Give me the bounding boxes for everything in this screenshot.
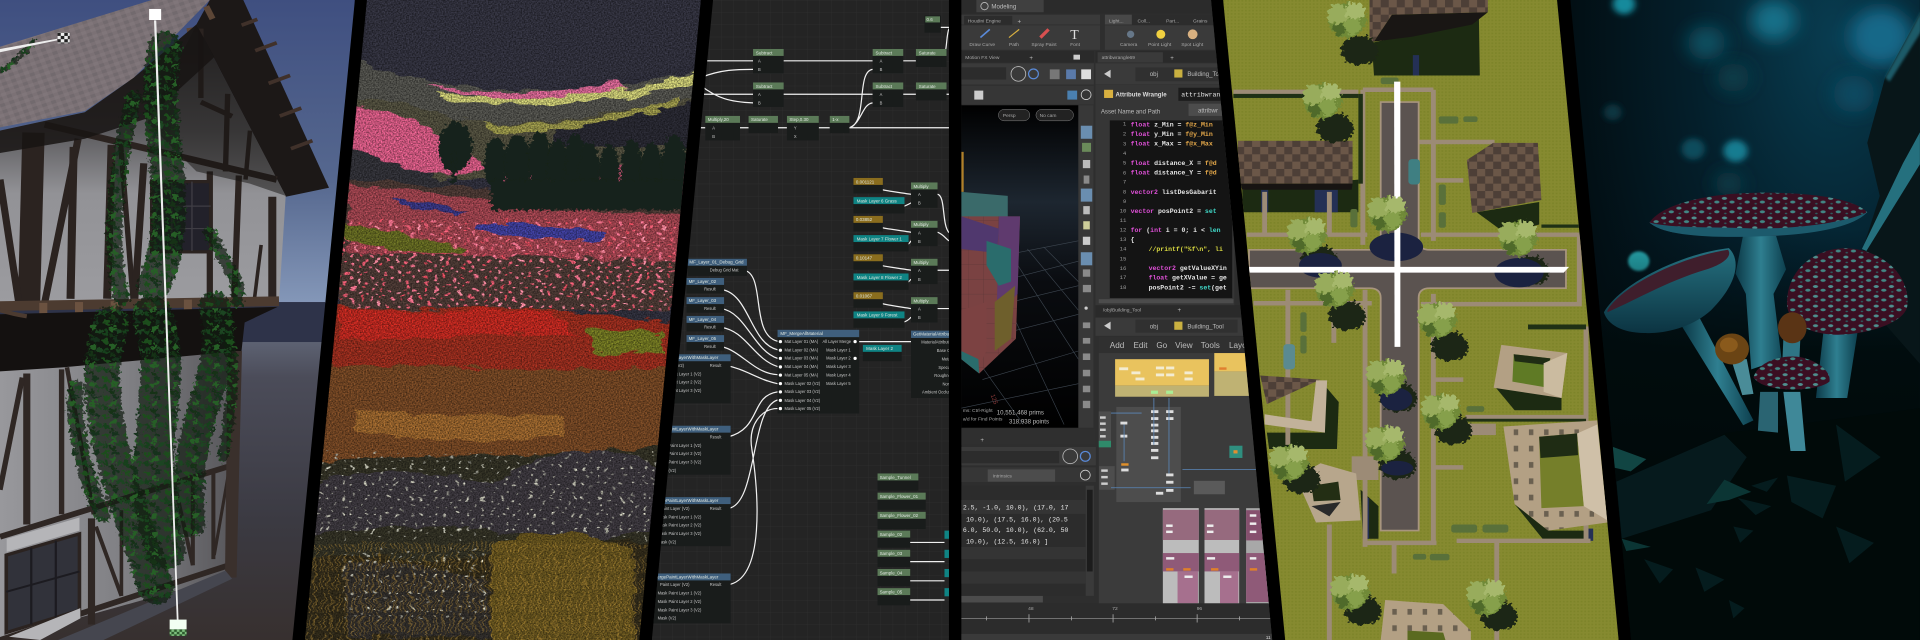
node wires [701,27,949,600]
vex code: float z_Min = f@z_Min [1131,122,1213,129]
right wrangle pane: Asset Name and Path [1101,108,1160,115]
lower left pane: 2.5, -1.0, 10.0), (17.0, 17 [963,504,1069,511]
timeline: 48 [1028,606,1034,612]
timeline: 72 [1112,606,1118,612]
node group: top math nodes: Y [794,125,797,130]
node: MF_MergeAllMaterial: Mask Layer 5 [826,381,851,386]
network editor: /obj/Building_Tool [1103,307,1141,313]
small hedges [1300,78,1508,560]
node group: material function layers: MF_Layer_05 [689,336,717,341]
node: material attributes: Base Color [937,348,958,353]
vex code: vector2 listDesGabarit [1131,189,1217,196]
network editor: Layout [1229,341,1254,350]
node group: texture samples: Sample_04 [880,570,903,575]
node group: texture samples: Sample_02 [880,532,903,537]
shelf: Draw Curve [969,42,995,48]
panel: town layout top view [1220,0,1622,640]
view pills [998,109,1073,121]
vex code: 7 [1123,179,1126,186]
node: MF_MergeAllMaterial: Mask Layer 02 (V2) [784,381,821,386]
gable shadow [148,58,286,196]
roof [0,0,210,127]
network editor: Add [1110,341,1125,350]
yellow network box right [1214,353,1249,396]
node group: mask multiply nodes: 0.01067 [856,294,873,299]
ui base [961,0,1288,640]
node group: mask multiply nodes: B [918,200,921,205]
rafters [128,5,313,150]
lower wall [0,351,241,640]
pane tabs [961,51,1094,104]
joists [39,300,192,313]
vex code: float getXValue = ge [1149,275,1227,282]
side nodes [1099,411,1272,494]
right wrangle pane: attribwrangle69 [1102,55,1135,61]
node: MF_MergeAllMaterial: Mask Layer 04 (V2) [784,398,821,403]
window upper [152,182,211,252]
node group: paint layer blends: Mask Paint Layer 3 (V2) [658,460,702,465]
node group: paint layer blends: Result [710,363,722,368]
node: MF_MergeAllMaterial: Mat Layer 05 (MA) [784,372,819,377]
vex code: 1 [1123,121,1127,128]
shelf: Point Light [1148,42,1172,48]
network editor [1096,305,1278,604]
gizmo line and handles [0,9,187,636]
vex code: float x_Max = f@x_Max [1131,141,1213,148]
node group: paint layer blends: Mask Paint Layer 1 (V2) [658,591,702,596]
node group: material function layers: MF_Layer_02 [689,279,717,284]
node group: top math nodes: Subtract [756,84,773,89]
right wrangle pane: attribwr [1198,108,1218,115]
node group: top math nodes: 1-x [832,117,839,122]
building: small courtyard [1296,463,1361,522]
network editor: + [1178,307,1182,314]
bottom handle [170,620,187,636]
network editor: Tools [1201,341,1220,350]
grid background [644,0,954,640]
node group: paint layer blends: Mask Paint Layer 3 (V2) [658,607,702,612]
vex code: 4 [1123,150,1127,157]
mushroom: tilted left [1604,248,1753,425]
node: MF_MergeAllMaterial: Mat Layer 04 (MA) [784,364,819,369]
node group: top math nodes: X [794,134,797,139]
node: MF_MergeAllMaterial: Mask Layer 05 (V2) [784,406,821,411]
vex code: 18 [1120,284,1127,291]
right wrangle pane: Building_Tool [1187,71,1224,78]
node group: paint layer blends: MergePaintLayerWithMaskLayer [653,498,719,503]
vex code: posPoint2 -= set(get [1149,284,1227,291]
node group: material function layers: MF_Layer_04 [689,317,717,322]
ivy strands [0,41,238,588]
node group: mask multiply nodes: Mask Layer 8 Flower 2 [857,275,902,280]
mushroom: tall [1649,193,1867,369]
node group: mask multiply nodes: A [918,268,921,273]
node group: mask multiply nodes: B [918,315,921,320]
node group: paint layer blends: Mask (V2) [658,468,677,473]
node: material attributes: Metallic [942,356,955,361]
node group: top math nodes: A [880,92,883,97]
tree shadows [1283,36,1549,631]
vex code: 11 [1120,217,1127,224]
node group: paint layer blends: Mask Paint Layer 2 (V2) [658,380,702,385]
node group: top math nodes: Multiply,20 [708,117,729,122]
log and leaves [1613,408,1920,640]
right wrangle pane: Attribute Wrangle [1116,91,1167,98]
node group: mask multiply nodes: 0.03852 [856,217,873,222]
node group: top math nodes: B [758,100,761,105]
top menu bar [961,0,1288,13]
node group: paint layer blends: MergePaintLayerWithMaskLayer [653,355,719,360]
node group: top math nodes [705,16,947,140]
panel: timber house with ivy [0,0,357,640]
network editor: View [1175,341,1193,350]
node group: top math nodes: A [880,58,883,63]
vex code: 15 [1120,255,1127,262]
node group: paint layer blends: Mask (V2) [658,616,677,621]
top menu bar: Modeling [991,4,1016,11]
node group: paint layer blends: MergePaintLayerWithMaskLayer [653,427,719,432]
viewport grid [961,241,1078,424]
node: material attributes: Ambient Occlusion [922,389,956,394]
pane tabs: Motion FX View [965,55,1000,61]
viewport stats: 318,938 points [1009,418,1049,425]
node group: top math nodes: Step,0.30 [789,117,809,122]
shelf: Light... [1109,18,1124,24]
node group: texture samples: Sample_05 [880,589,903,594]
network editor: obj [1150,324,1158,331]
node group: top math nodes: Subtract [876,84,893,89]
node group: top math nodes: B [880,100,883,105]
node group: paint layer blends: Mask Paint Layer 2 (V2) [658,451,702,456]
vex code: vector posPoint2 = set [1131,208,1217,215]
upper wall [0,24,286,306]
node group: mask multiply nodes: A [918,307,921,312]
timeline: 96 [1197,606,1202,612]
ground [10,342,322,640]
node group: paint layer blends: Mask Paint Layer 2 (V2) [658,523,702,528]
building: courtyard top right [1494,345,1567,398]
sidewalks and paths [1233,90,1591,640]
view pills: No cam [1040,113,1056,119]
node group: material function layers: Result [704,325,717,330]
node: MF_MergeAllMaterial: Mat Layer 03 (MA) [784,356,819,361]
node group: top math nodes: A [758,58,761,63]
node group: mask multiply nodes: A [918,192,921,197]
shelf: Camera [1120,42,1138,48]
node: material attributes [911,331,958,398]
node group: top math nodes: Saturate [919,50,936,55]
node group: paint layer blends: Result [710,582,722,587]
vex code: 9 [1123,198,1127,205]
node group: top math nodes: A [758,92,761,97]
node group: top math nodes: B [880,67,883,72]
shelf: T [1070,28,1079,43]
node group: mask multiply nodes: 0.10147 [856,256,873,261]
node group: material function layers: Result [704,344,717,349]
side gizmo line [0,39,57,52]
node group: paint layer blends: Result [710,434,722,439]
lower left pane: 10.0), (17.5, 16.0), (20.5 [966,517,1068,524]
vertical gizmo line [154,20,179,620]
vex code: float y_Min = f@y_Min [1131,131,1213,138]
shelf: Part... [1166,18,1179,24]
horizon water band [0,302,357,343]
lower left pane: 10.0), (12.5, 16.0) ] [966,539,1048,546]
shelf: Path [1009,42,1019,48]
vex code: 2 [1123,131,1127,138]
node group: top math nodes: Saturate [751,117,768,122]
lower left pane: + [980,437,984,444]
node group: material function layers: Debug Grid Mat [710,267,739,272]
blue shadow accents [1261,55,1593,541]
node: material attributes: MaterialAttributes [921,339,953,344]
cars [1283,159,1468,435]
vex code: 5 [1123,159,1127,166]
vex code: float distance_X = f@d [1131,160,1217,167]
node group: mask multiply nodes: Multiply [913,184,929,189]
node group: mask multiply nodes: 0.001121 [856,179,875,184]
lower left pane: Intrinsics [993,474,1012,480]
node group: material function layers: Result [704,306,717,311]
colored building [961,152,1020,373]
node group: top math nodes: Subtract [756,50,773,55]
house: left [1238,141,1353,190]
right wrangle pane: obj [1150,71,1158,78]
node group: texture samples: Sample_03 [880,551,903,556]
node group: paint layer blends [652,354,731,623]
viewport [961,105,1078,428]
node group: paint layer blends: Mask Paint Layer 3 (V2) [658,388,702,393]
building: bottom [1381,600,1471,640]
foundation [58,571,232,640]
node group: paint layer blends: Mask Paint Layer 3 (V2) [658,531,702,536]
vex code: 6 [1123,169,1127,176]
node group: top math nodes: B [758,67,761,72]
node group: top math nodes: A [712,125,715,130]
forest background [1568,0,1920,640]
sky [0,0,357,303]
vex code: 3 [1123,140,1127,147]
shelf [961,15,1215,50]
vex code: //printf("%f\n", li [1149,246,1223,253]
node group: mask multiply nodes: Mask Layer 9 Forest [857,313,898,318]
node group: mask multiply nodes [853,178,938,328]
side checker handle [58,32,70,43]
panel: houdini interface [961,0,1288,640]
node group: mask multiply nodes: Multiply [913,260,929,265]
vex code: 17 [1120,274,1126,281]
vex code: 12 [1120,226,1127,233]
node group: top math nodes: B [712,134,715,139]
vex code: float distance_Y = f@d [1131,170,1217,177]
tree trunk [1862,8,1920,367]
node: material attributes: Roughness [934,373,955,378]
mushroom: small orange pair [1715,312,1807,395]
viewport stats: a/d for Find Points [963,416,1003,422]
mushroom: small front [1753,357,1830,451]
shelf: Font [1070,42,1081,48]
house: top [1370,0,1488,42]
shelf: Spray Paint [1031,42,1057,48]
panel: glowing mushrooms [1568,0,1920,640]
node group: paint layer blends: Mask (V2) [658,539,677,544]
eaves [196,0,329,197]
corner post [225,351,242,578]
white cross gizmo [1249,82,1569,347]
vex code: for (int i = 0; i < len [1131,227,1221,234]
node group: mask multiply nodes: B [918,239,921,244]
viewport stats: 10,551,468 prims [997,409,1044,416]
vex code: { [1131,237,1135,244]
house: right [1467,143,1541,213]
terrain layers [305,0,701,640]
house building [0,0,329,640]
shelf: + [1018,18,1022,25]
floor beam [0,301,279,306]
pane tabs: + [1029,55,1033,62]
node group: mask multiply nodes: Mask Layer 6 Grass [857,198,897,203]
node group: texture samples: Sample_Tunnel [880,475,911,480]
node group: paint layer blends: Mask Paint Layer 2 (V2) [658,599,702,604]
lower timbers [0,310,232,640]
node group: material function layers: Result [704,287,717,292]
node: MF_MergeAllMaterial: MF_MergeAllMaterial [780,331,823,336]
node: MF_MergeAllMaterial: Mask Layer 1 [826,347,851,352]
roads [1249,102,1566,531]
node group: material function layers: MF_Layer_01_Debug_Grid [689,260,744,265]
node group: paint layer blends: Mask Paint Layer 1 (V2) [658,372,702,377]
node group: mask multiply nodes: A [918,230,921,235]
shelf: Coll... [1138,18,1150,24]
node group: mask multiply nodes: Multiply [913,298,929,303]
node: material attributes: GetMaterialAttributes [913,332,956,337]
shelf: Spot Light [1181,42,1204,48]
node: MF_MergeAllMaterial: Mask Layer 4 [826,372,851,377]
node: mask layer 2 output [863,345,902,361]
vex code: 14 [1120,246,1127,253]
node: MF_MergeAllMaterial: Mask Layer 03 (V2) [784,389,821,394]
vex code: 10 [1120,208,1127,215]
node group: mask multiply nodes: B [918,277,921,282]
node group: paint layer blends: Paint Layer (V2) [660,506,690,511]
node group: material function layers [687,259,747,351]
tool strip [1078,105,1093,428]
network editor: Go [1156,341,1168,350]
lower left pane [961,429,1096,602]
dark hedges and fence lines [1233,94,1586,422]
node group: mask multiply nodes: Multiply [913,222,929,227]
node: MF_MergeAllMaterial: Mask Layer 3 [826,364,851,369]
network editor: Building_Tool [1187,324,1224,331]
node group: paint layer blends: Mask Paint Layer 1 (V2) [658,514,702,519]
trees [1269,2,1537,615]
network editor: Edit [1133,341,1148,350]
lower darkness [1568,229,1920,640]
overhang shadow [0,307,278,372]
vex code: 16 [1120,265,1127,272]
node group: mask multiply nodes: Mask Layer 7 Flower 1 [857,236,902,241]
viewport stats: 125 [989,393,999,406]
dark trees [438,122,687,210]
node: MF_MergeAllMaterial: All Layer Merge [822,339,852,344]
building: courtyard left [1260,376,1327,433]
pink network columns [1163,508,1273,604]
node group: paint layer blends: Mask Paint Layer 1 (V2) [658,443,702,448]
node: MF_MergeAllMaterial [778,330,859,413]
right wrangle pane: + [1170,55,1174,62]
node group: top math nodes: Subtract [876,50,893,55]
bokeh lights [1604,0,1912,271]
panel: flower field landscape [305,0,701,640]
node group: texture samples: Sample_Flower_02 [880,513,919,518]
lawn [1220,0,1622,640]
gray network box [1116,398,1181,502]
mushroom: right cap [1787,248,1908,398]
viewport stats: ms: Ctrl-Right [963,408,993,414]
node: material attributes: Specular [938,365,955,370]
upper timbers [0,29,277,303]
lower left pane: 6.0, 50.0, 10.0), (62.0, 50 [963,527,1069,534]
vex code [1120,121,1227,291]
node group: texture samples [878,473,950,605]
upper shadow under eaves [0,24,214,153]
lower window [6,518,80,640]
node: material attributes: Normal [942,381,956,386]
node group: material function layers: MF_Layer_03 [689,298,717,303]
panel: material node graph [644,0,958,640]
vex code: 8 [1123,188,1127,195]
view pills: Persp [1003,113,1016,119]
shelf: Houdini Engine [968,18,1001,24]
right wrangle pane [1096,51,1234,305]
yellow network box [1115,359,1209,397]
vex code: vector2 getValueXYin [1149,265,1227,272]
node: MF_MergeAllMaterial: Mat Layer 02 (MA) [784,347,819,352]
building: large courtyard [1503,420,1607,531]
building shadows [1242,18,1591,543]
viewport stats [963,393,1049,425]
node group: top math nodes: Saturate [919,84,936,89]
node: MF_MergeAllMaterial: Mat Layer 01 (MA) [784,339,819,344]
node: MF_MergeAllMaterial: Mask Layer 2 [826,356,851,361]
node: mask layer 2 output: Mask Layer 2 [866,346,893,351]
shelf: Grains [1193,18,1208,24]
top handle [149,9,161,20]
node group: texture samples: Sample_Flower_01 [880,494,919,499]
timeline [961,603,1288,640]
node group: paint layer blends: Result [710,506,722,511]
right wrangle pane: attribwrangle [1181,92,1232,99]
node group: paint layer blends: MergePaintLayerWithMaskLayer [653,574,719,579]
node group: paint layer blends: (V2) [676,363,685,368]
node group: top math nodes: 0.6 [927,17,933,22]
node group: paint layer blends: Paint Layer (V2) [660,582,690,587]
vex code: 13 [1120,236,1127,243]
